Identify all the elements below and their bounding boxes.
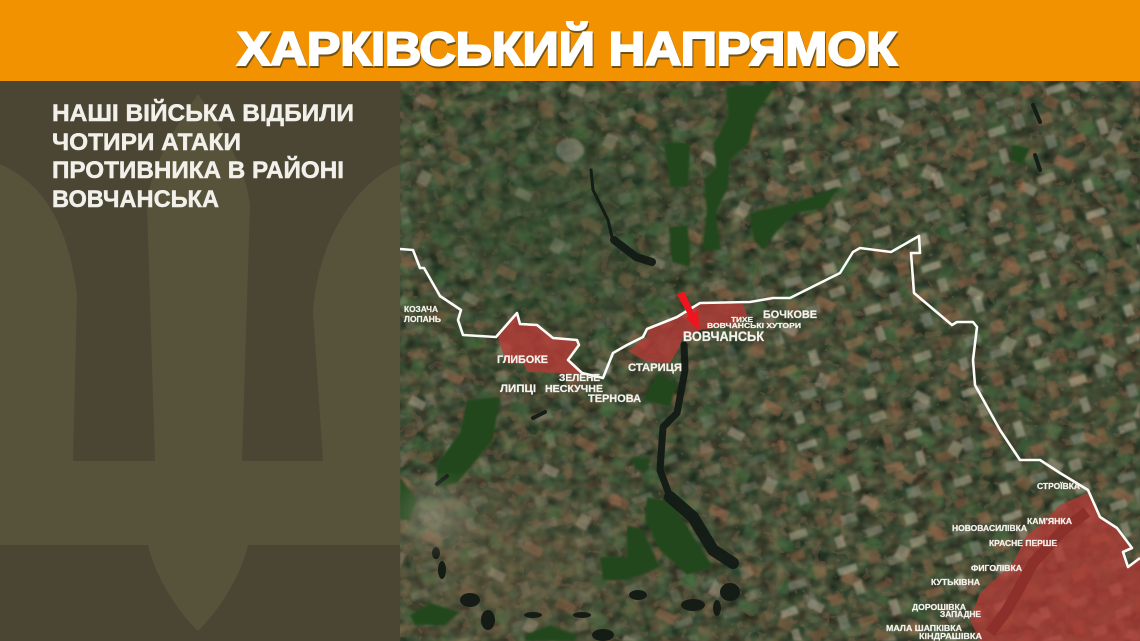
place labels: ТЕРНОВА [588,393,641,405]
summary text: ВОВЧАНСЬКА [52,186,219,213]
summary text: НАШІ ВІЙСЬКА ВІДБИЛИ [52,99,354,127]
regional tone [390,110,660,640]
place labels: КРАСНЕ ПЕРШЕ [989,538,1057,548]
urban area [403,489,467,541]
occupied zone: Vovchansk [628,304,747,363]
satellite map [390,81,1140,641]
border line [400,236,1140,567]
attack arrow [677,291,699,331]
place labels: ЗАПАДНЕ [940,609,981,619]
place labels: ЗЕЛЕНЕ [559,373,600,384]
place labels: ДОРОШІВКА [912,602,966,612]
occupied zone: southeast [970,493,1140,641]
title: ХАРКІВСЬКИЙ НАПРЯМОК [237,22,897,75]
summary text: ЧОТИРИ АТАКИ [52,129,241,156]
field texture [400,81,1140,641]
place labels: ТИХЕ [731,315,753,324]
place labels: ВОВЧАНСЬКІ ХУТОРИ [707,321,801,330]
place labels: ФИГОЛІВКА [971,563,1022,573]
trident emblem [0,94,400,631]
place labels: НЕСКУЧНЕ [545,384,603,395]
dark ponds [432,547,740,641]
place labels: КАМ'ЯНКА [1027,516,1072,526]
place labels: МАЛА ШАПКІВКА [886,623,962,633]
title banner [0,0,1140,81]
place labels: НОВОВАСИЛІВКА [952,523,1027,533]
left panel [0,81,400,641]
place labels: КОЗАЧА [404,305,438,314]
place labels: СТРОЇВКА [1037,481,1080,491]
place labels: КІНДРАШІВКА [919,631,982,641]
northern town [556,138,584,162]
place labels: ВОВЧАНСЬК [683,328,764,344]
place labels [404,305,1080,641]
forests [400,83,1030,641]
summary text: ПРОТИВНИКА В РАЙОНІ [52,156,344,184]
place labels: КУТЬКІВНА [931,577,980,587]
place labels: ГЛИБОКЕ [497,354,548,366]
occupied zone: Hlyboke [498,313,582,373]
summary text [52,99,354,213]
place labels: БОЧКОВЕ [763,309,817,321]
place labels: ЛИПЦІ [500,383,536,395]
place labels: СТАРИЦЯ [628,362,682,374]
place labels: ЛОПАНЬ [404,315,441,324]
rivers and reservoirs [437,105,1040,563]
